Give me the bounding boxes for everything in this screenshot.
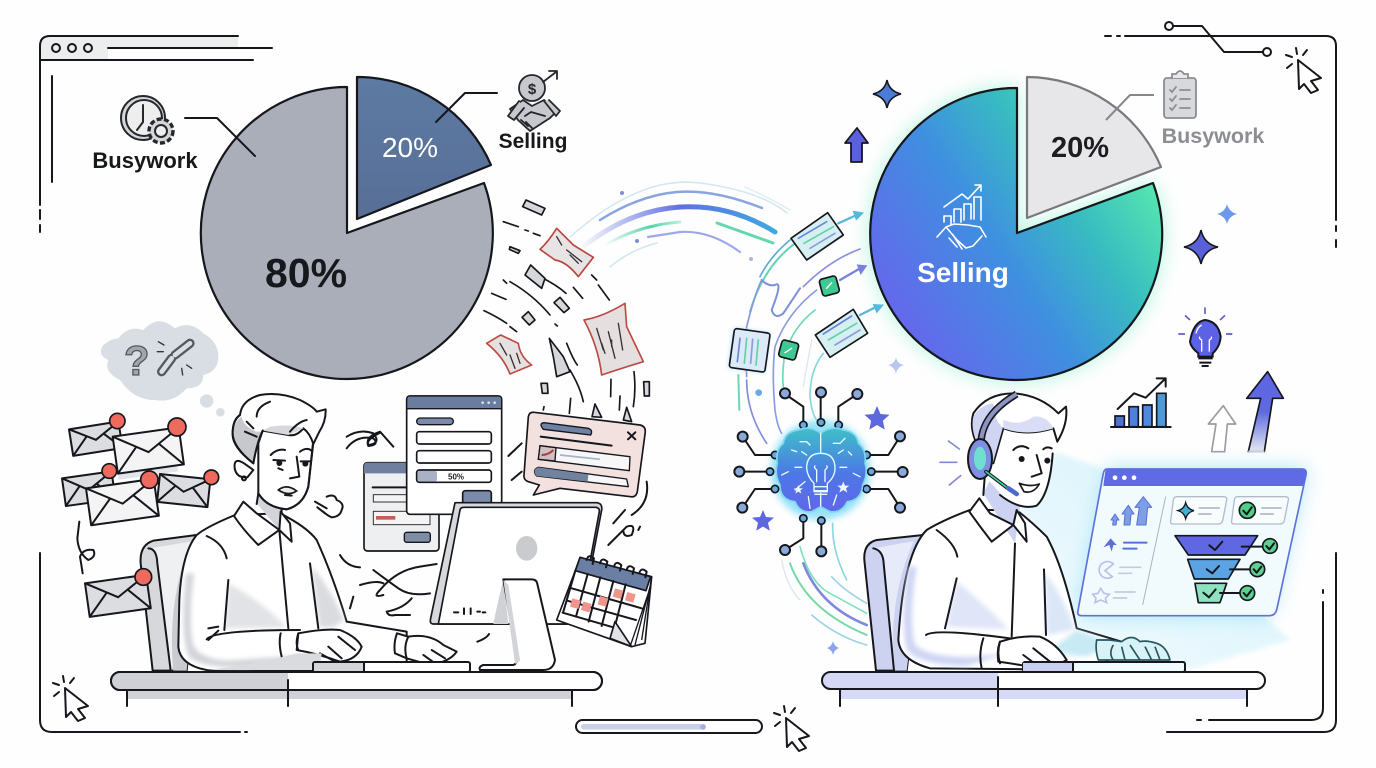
lightbulb icon — [1178, 307, 1232, 366]
sparkle bottom of stream — [827, 641, 839, 655]
cursor icon bottom left — [53, 676, 88, 721]
label text: Busywork — [1162, 124, 1264, 148]
dashboard panel — [1078, 469, 1306, 616]
right person at desk — [864, 393, 1170, 671]
hair — [233, 394, 326, 480]
red torn paper small — [487, 335, 532, 374]
data swoosh arcs between charts — [570, 182, 790, 267]
rising arrows — [1111, 497, 1152, 525]
collar — [234, 502, 292, 545]
sigh puff — [315, 496, 343, 517]
bar chart icon with growth arrow — [1111, 378, 1171, 427]
right keyboard — [1023, 662, 1185, 672]
label text: Selling — [917, 257, 1009, 288]
far arm hand — [394, 633, 457, 665]
card middle — [815, 309, 868, 357]
gradient arrow up — [1247, 372, 1283, 452]
headset — [968, 394, 1017, 494]
right pie chart: selling 80 percent — [870, 77, 1162, 380]
value 20 percent: 20% — [382, 132, 438, 163]
icon: clock and gear — [121, 96, 173, 143]
label text: Selling — [499, 130, 567, 153]
leader line — [185, 118, 255, 156]
hands — [980, 636, 1170, 668]
back form window — [364, 463, 439, 551]
dashboard light beam — [1000, 452, 1290, 672]
calendar — [557, 556, 652, 647]
right window frame — [1105, 22, 1336, 732]
dollar sign: $ — [528, 81, 537, 98]
progress value: 50% — [448, 472, 464, 481]
sparkle dark right — [1184, 230, 1218, 264]
brain with lightbulb and circuit nodes — [734, 387, 908, 556]
collar — [969, 498, 1027, 542]
funnel — [1175, 536, 1258, 603]
value 80 percent: 80% — [265, 250, 347, 296]
chair — [864, 535, 923, 671]
listening rays — [940, 441, 961, 485]
worried expression — [271, 449, 312, 496]
arrow up small — [845, 128, 868, 162]
shirt — [898, 510, 1122, 669]
label: busywork with clipboard icon — [1106, 71, 1264, 148]
neck and face — [983, 428, 1053, 543]
thought cloud with question mark and broken link — [101, 321, 225, 417]
label text: Busywork — [92, 148, 198, 173]
icon: clipboard — [1164, 71, 1196, 118]
broken chain link — [157, 342, 192, 375]
card left — [729, 328, 770, 372]
glow — [870, 88, 1162, 380]
icon: handshake and coin — [508, 71, 560, 131]
label: selling with handshake icon — [436, 71, 567, 153]
label: busywork with clock icon — [92, 96, 255, 173]
gray paper fragments — [509, 200, 649, 422]
left desk — [111, 672, 602, 706]
error popup dialog — [524, 412, 645, 497]
outline arrow up — [1208, 406, 1236, 452]
monitor and keyboard — [430, 503, 602, 670]
pie slice: blue 20 percent — [357, 77, 491, 219]
check chip — [819, 275, 840, 297]
hair — [972, 393, 1066, 463]
question mark: ? — [124, 337, 149, 384]
envelope stack with red notification dots — [62, 413, 219, 617]
neck and face — [257, 428, 314, 530]
squiggle near envelopes — [77, 433, 380, 573]
card glow — [728, 328, 770, 373]
flying paper scraps and motion lines — [484, 200, 649, 422]
progress bar — [576, 720, 762, 733]
sparkle faint — [888, 357, 904, 374]
pie slice: gradient 80 percent — [870, 88, 1162, 380]
red torn paper large — [584, 303, 643, 375]
value 20 percent: 20% — [1051, 132, 1109, 164]
left window frame — [40, 36, 272, 732]
right side data stream — [728, 211, 884, 645]
right desk — [822, 672, 1265, 706]
red torn paper top — [540, 228, 593, 277]
shirt — [178, 513, 407, 671]
dashboard glow — [1078, 468, 1307, 616]
front form window — [407, 396, 502, 514]
sparkle dark blue top — [873, 80, 901, 108]
leader line — [436, 93, 497, 122]
pie slice: gray 80 percent — [201, 87, 493, 379]
left person at desk — [141, 394, 457, 671]
hand and cuff — [207, 630, 362, 670]
cursor icon bottom centre — [774, 706, 809, 751]
tangled wires — [340, 431, 647, 615]
check chip lower — [778, 339, 799, 361]
card top — [791, 213, 843, 260]
list rows — [1103, 538, 1117, 552]
feature boxes — [1171, 497, 1227, 524]
chair — [141, 535, 199, 671]
keyboard — [313, 662, 470, 672]
pie slice: gray 20 percent — [1027, 77, 1161, 218]
leader line — [1106, 95, 1154, 120]
cursor icon top right — [1286, 48, 1321, 93]
stars — [752, 406, 890, 531]
title bar — [1103, 469, 1306, 486]
icon: chart with handshake — [937, 185, 986, 249]
left pie chart: busywork 80 percent — [201, 77, 493, 379]
sparkle light right — [1217, 204, 1237, 224]
